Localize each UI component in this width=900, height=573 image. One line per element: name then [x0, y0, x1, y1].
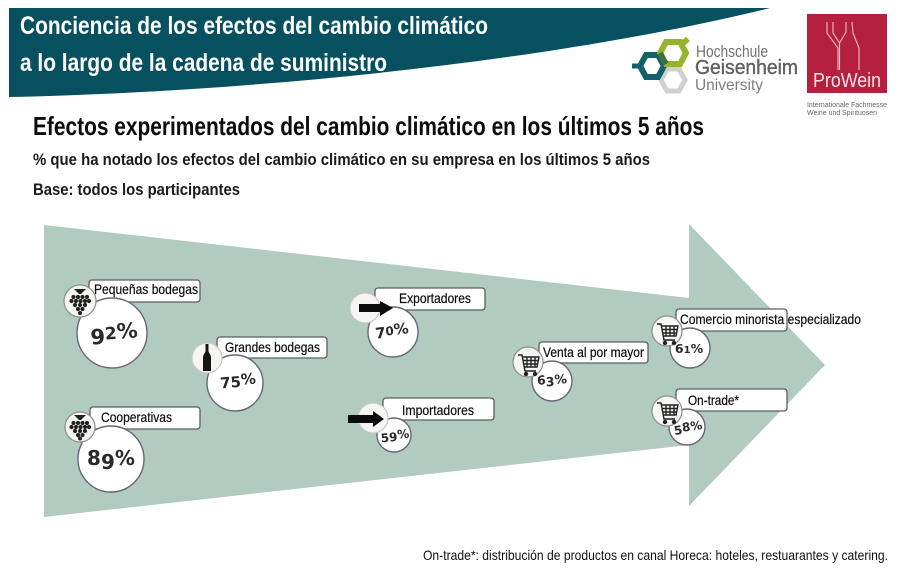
logo: ProWein: Weine und Spirituosen: [807, 110, 877, 117]
logo: Hochschule Geisenheim University: Hochschule: [696, 42, 768, 61]
item: Pequeñas bodegas 92%: 2: [104, 324, 117, 345]
heading: Efectos experimentados del cambio climático en los últimos 5 años: [33, 111, 704, 141]
icon: cart: [657, 403, 678, 424]
logo: Hochschule Geisenheim University: [632, 39, 798, 94]
logo: Hochschule Geisenheim University: University: [695, 77, 763, 94]
title: [20, 12, 488, 77]
logo: ProWein: ProWein: [813, 70, 881, 92]
item: Cooperativas 89%: [65, 407, 200, 492]
icon: grapes: [69, 415, 91, 440]
base note: Base: todos los participantes: [33, 180, 240, 199]
supply chain arrow: [44, 224, 825, 517]
item: Exportadores 70%: 7: [374, 324, 386, 343]
icon: wine bottle: [203, 344, 211, 371]
item: Grandes bodegas 75%: %: [240, 369, 257, 389]
icon: arrow: [348, 411, 384, 427]
item: Comercio minorista especializado 61%: [652, 309, 861, 368]
item: Venta al por mayor 63%: 3: [545, 374, 555, 389]
logo: Hochschule Geisenheim University: Geisenheim: [695, 57, 798, 79]
item: Venta al por mayor 63%: %: [554, 371, 568, 387]
item: Pequeñas bodegas 92%: Pequeñas bodegas: [94, 281, 198, 297]
item: Pequeñas bodegas 92%: 9: [90, 325, 106, 350]
logo: ProWein: Internationale Fachmesse: [807, 102, 887, 109]
item: Exportadores 70%: 0: [385, 324, 394, 339]
item: Cooperativas 89%: Cooperativas: [101, 409, 172, 425]
item: Comercio minorista especializado 61%: Comercio minorista especializado: [680, 311, 861, 327]
item: On-trade 58%: 8: [681, 420, 691, 435]
item: Cooperativas 89%: 8: [87, 446, 101, 470]
item: Pequeñas bodegas 92%: %: [116, 318, 138, 344]
icon: cart: [657, 324, 678, 344]
item: Exportadores 70%: Exportadores: [399, 290, 471, 306]
item: Venta al por mayor 63%: Venta al por mayor: [543, 344, 644, 360]
title: a lo largo de la cadena de suministro: [20, 49, 387, 77]
logo: ProWein: [807, 14, 887, 117]
item: Pequeñas bodegas 92%: [64, 280, 200, 368]
subheading: % que ha notado los efectos del cambio climático en su empresa en los últimos 5 años: [33, 150, 650, 169]
item: Cooperativas 89%: %: [115, 446, 135, 470]
item: Grandes bodegas 75%: [192, 337, 327, 411]
item: Grandes bodegas 75%: 75: [219, 373, 242, 393]
item: On-trade 58%: %: [689, 418, 703, 434]
item: Exportadores 70%: %: [393, 319, 410, 339]
item: Importadores 59%: 59: [380, 430, 398, 445]
title: Conciencia de los efectos del cambio climático: [20, 12, 488, 40]
item: Grandes bodegas 75%: Grandes bodegas: [225, 339, 320, 355]
item: Importadores 59%: %: [396, 427, 410, 442]
item: Importadores 59%: Importadores: [402, 402, 474, 418]
item: On-trade 58%: 5: [673, 423, 683, 438]
item: Cooperativas 89%: 9: [101, 450, 115, 474]
item: Venta al por mayor 63%: [513, 342, 648, 401]
item: Importadores 59%: [348, 398, 494, 452]
item: Venta al por mayor 63%: 6: [537, 372, 546, 388]
header banner: [9, 8, 770, 97]
icon: grapes: [69, 289, 91, 315]
item: On-trade 58%: [652, 389, 787, 445]
item: Exportadores 70%: [350, 288, 485, 357]
item: Comercio minorista especializado 61%: 61%: [675, 341, 704, 356]
icon: arrow: [359, 301, 393, 316]
item: On-trade 58%: On-trade*: [688, 392, 739, 408]
icon: cart: [518, 355, 539, 376]
